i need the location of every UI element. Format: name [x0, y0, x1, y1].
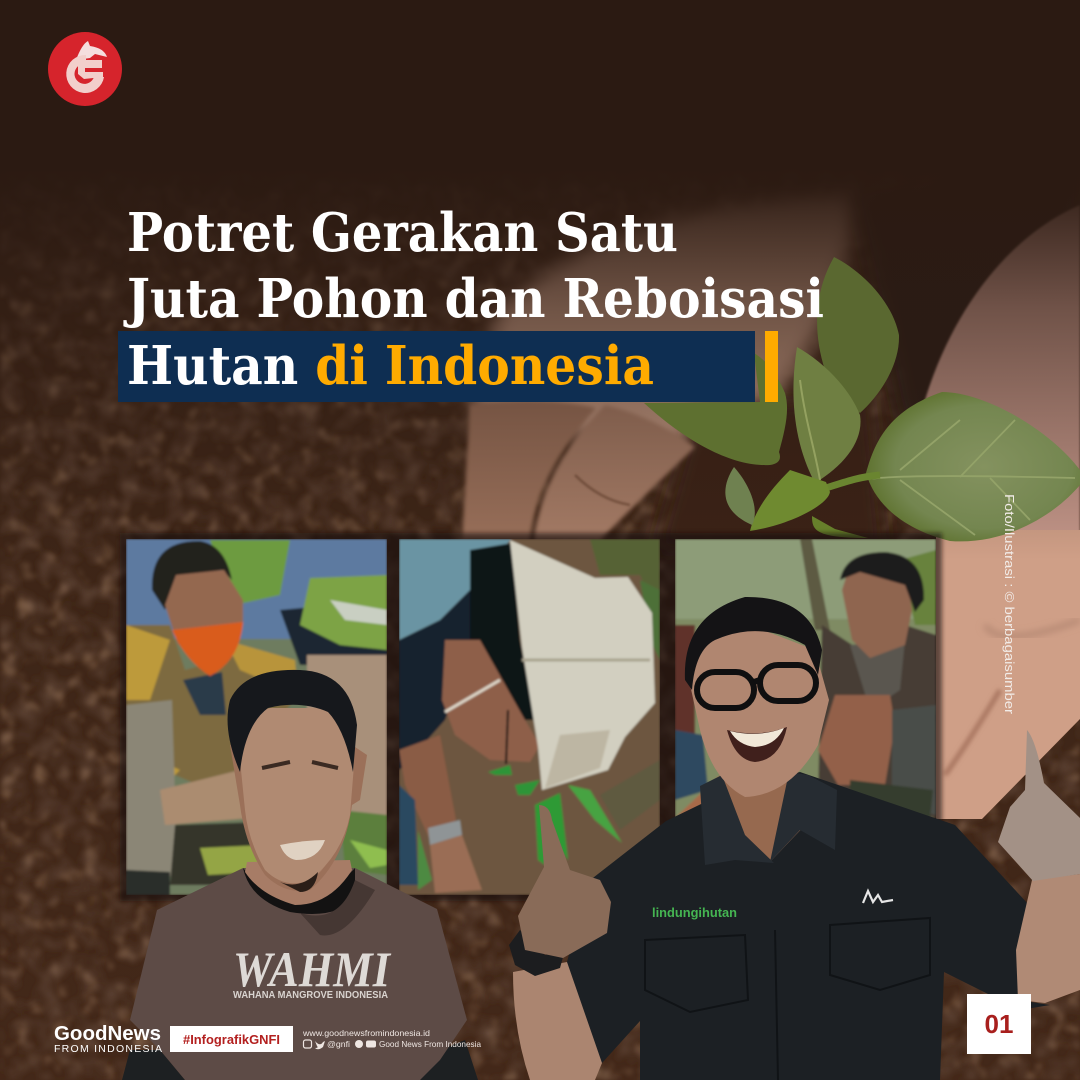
footer: GoodNews logo: GoodNews — [54, 1023, 161, 1045]
label: WAHMI print: WAHANA MANGROVE INDONESIA — [233, 990, 388, 1001]
photo credit: Foto/Ilustrasi : © berbagaisumber — [1002, 494, 1016, 714]
illustration: hands holding the soil — [0, 0, 1080, 819]
icon: youtube — [366, 1040, 376, 1048]
title line 3: Hutan di Indonesia — [127, 335, 654, 397]
person: man in brown WAHMI T-shirt — [122, 670, 478, 1080]
label: shirt badge: lindungihutan — [652, 906, 737, 920]
footer: website and social media: @gnfi — [327, 1039, 350, 1049]
leaf: small spotted — [725, 467, 755, 525]
leaf: centre — [793, 347, 861, 483]
photo: man in orange mask planting a seedling — [126, 539, 387, 895]
title line 1: Potret Gerakan Satu — [127, 202, 678, 264]
label: shirt pockets and buttons — [645, 918, 930, 1080]
page number — [967, 994, 1031, 1054]
footer: GoodNews logo — [54, 1023, 162, 1055]
label: right hand thumbs up — [998, 730, 1080, 881]
logo: GNFI round badge — [48, 32, 122, 106]
title accent bar — [765, 331, 778, 402]
leaf: bottom — [812, 516, 868, 538]
label: left hand pointing with watch — [509, 805, 611, 976]
leaf: small centre — [750, 470, 830, 531]
person: smiling man in black shirt with glasses — [509, 597, 1080, 1080]
leaf: left — [644, 353, 787, 465]
page number: 01 — [985, 1009, 1013, 1039]
footer: hashtag label: #InfografikGNFI — [183, 1032, 280, 1047]
title highlight bar — [118, 331, 755, 402]
title line 2: Juta Pohon dan Reboisasi — [123, 268, 824, 330]
footer: website and social media — [302, 1028, 481, 1049]
footer: website and social media: Good News From Indonesia — [379, 1039, 481, 1049]
leaf: top — [817, 257, 899, 413]
photo: man in camouflage examining roots — [675, 539, 936, 818]
footer: hashtag label — [170, 1026, 293, 1052]
footer: website and social media: www.goodnewsfromindonesia.id — [302, 1028, 430, 1038]
icon: facebook — [355, 1040, 363, 1048]
footer: GoodNews logo: FROM INDONESIA — [54, 1043, 162, 1055]
icon: twitter — [315, 1041, 325, 1049]
label: WAHMI print: WAHMI — [233, 941, 391, 997]
photo: man in white bucket hat planting — [399, 539, 660, 895]
label: glasses — [697, 665, 816, 708]
leaf: large right — [866, 392, 1080, 541]
shadow behind the photos — [120, 533, 942, 901]
icon: instagram — [304, 1040, 312, 1048]
illustration: seedling — [644, 257, 1080, 541]
title — [118, 202, 824, 402]
